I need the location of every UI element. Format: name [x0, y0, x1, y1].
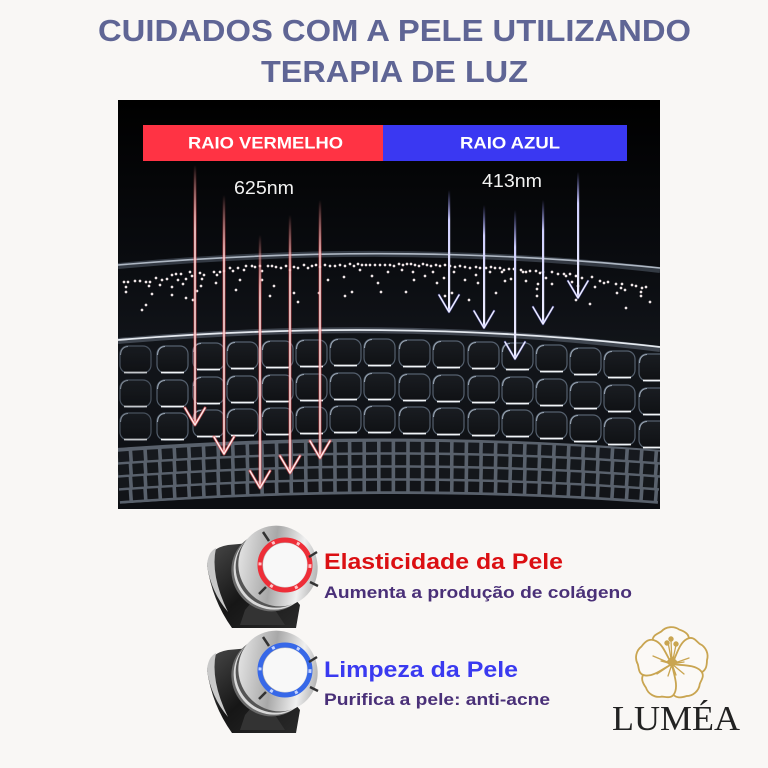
red ray arrows: [185, 165, 330, 488]
text: skin cleansing: Limpeza da Pele: [324, 657, 518, 682]
wavelength label: 413nm: 413nm: [482, 171, 542, 191]
logo: Luméa: [612, 626, 741, 738]
text: skin cleansing: Purifica a pele: anti-acne: [324, 691, 550, 709]
lower skin layer arc: [118, 330, 660, 349]
particles: [124, 264, 650, 310]
wavelength label: 625nm: 625nm: [234, 178, 294, 198]
small skin cell grid: [118, 447, 660, 514]
large skin cells: [120, 339, 670, 448]
header: blue ray: [383, 125, 627, 161]
header: blue ray: RAIO AZUL: [460, 134, 560, 152]
title: TERAPIA DE LUZ: [261, 54, 528, 89]
header: red ray: [143, 125, 383, 161]
panel: light therapy skin diagram: [118, 100, 670, 514]
text: skin cleansing: [324, 657, 550, 709]
text: skin elasticity: Aumenta a produção de colágeno: [324, 584, 632, 602]
title: [98, 13, 691, 89]
upper skin layer arc: [118, 254, 660, 270]
text: skin elasticity: [324, 549, 632, 602]
header: red ray: RAIO VERMELHO: [188, 134, 343, 152]
text: skin elasticity: Elasticidade da Pele: [324, 549, 563, 574]
logo: Luméa: LUMÉA: [612, 699, 741, 738]
icon: blue light device: [207, 615, 333, 733]
icon: gold hibiscus flower: [632, 626, 713, 705]
title: CUIDADOS COM A PELE UTILIZANDO: [98, 13, 691, 48]
icon: red light device: [207, 510, 333, 628]
blue ray arrows: [439, 172, 588, 359]
